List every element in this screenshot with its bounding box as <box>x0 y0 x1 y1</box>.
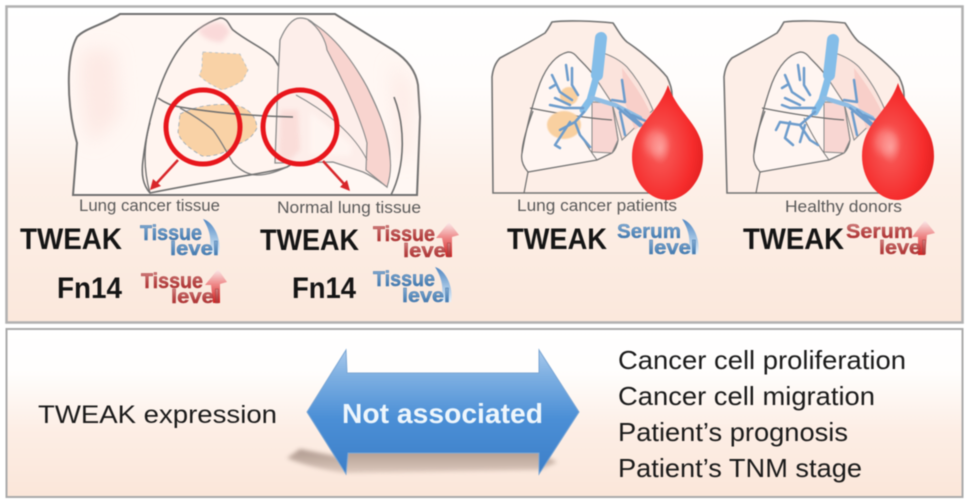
torso outline <box>69 14 420 195</box>
label: TWEAK: TWEAK <box>20 223 122 256</box>
badge: tissue level down: level <box>170 239 219 260</box>
badge: serum level up <box>846 220 935 259</box>
lower tumor <box>178 104 257 156</box>
illustration: healthy donor chest <box>724 21 904 193</box>
caption: normal lung tissue: Normal lung tissue <box>277 199 421 217</box>
illustration: chest with tumor-bearing lung <box>69 14 420 195</box>
badge: tissue level up <box>141 269 227 308</box>
list: associated factors <box>618 345 906 483</box>
list: associated factors: Cancer cell migration <box>618 381 875 411</box>
badge: tissue level up: Tissue <box>373 223 435 246</box>
label: TWEAK: TWEAK <box>507 223 607 256</box>
tumors <box>560 87 578 105</box>
label: TWEAK: TWEAK <box>260 224 359 257</box>
right lung in view <box>142 18 302 193</box>
upper tumor <box>199 52 248 90</box>
caption: lung cancer patients: Lung cancer patients <box>517 197 677 215</box>
arrow shadow <box>287 449 557 473</box>
airway tree <box>550 38 648 148</box>
list: associated factors: Patient’s TNM stage <box>618 453 862 483</box>
badge: tissue level up: level <box>171 287 220 308</box>
icon: blood drop <box>632 85 703 200</box>
badge: tissue level down: Tissue <box>373 268 435 291</box>
panel: tissue and serum levels <box>6 6 962 322</box>
magnifier: lung cancer tissue <box>150 90 240 190</box>
arrow label: Not associated <box>342 398 543 429</box>
badge: tissue level down: Tissue <box>140 222 202 245</box>
panel: clinical association <box>6 329 962 497</box>
text: TWEAK expression: TWEAK expression <box>38 401 277 429</box>
list: associated factors: Cancer cell proliferation <box>618 345 906 375</box>
badge: serum level down <box>617 219 699 259</box>
left lung <box>275 18 390 187</box>
badge: tissue level up: level <box>403 241 452 262</box>
badge: tissue level up: Tissue <box>141 270 203 293</box>
badge: serum level up: Serum <box>846 221 913 243</box>
magnifier: normal lung tissue <box>263 90 350 191</box>
illustration: lung cancer patient chest <box>492 21 672 193</box>
label: TWEAK: TWEAK <box>743 223 844 256</box>
badge: serum level down: level <box>648 238 697 259</box>
badge: serum level down: Serum <box>617 221 681 243</box>
badge: tissue level down <box>140 219 220 260</box>
label: Fn14: Fn14 <box>57 272 122 305</box>
badge: serum level up: level <box>879 238 927 259</box>
badge: tissue level down: level <box>402 286 450 307</box>
caption: healthy donors: Healthy donors <box>785 198 902 216</box>
lung fissures <box>158 98 293 117</box>
badge: tissue level up <box>373 222 459 262</box>
list: associated factors: Patient’s prognosis <box>618 417 848 447</box>
caption: lung cancer tissue: Lung cancer tissue <box>79 197 220 215</box>
airway tree <box>776 40 880 145</box>
badge: tissue level down <box>373 267 452 307</box>
double arrow: not associated <box>307 350 579 474</box>
icon: blood drop <box>862 83 934 200</box>
label: Fn14: Fn14 <box>292 272 356 305</box>
